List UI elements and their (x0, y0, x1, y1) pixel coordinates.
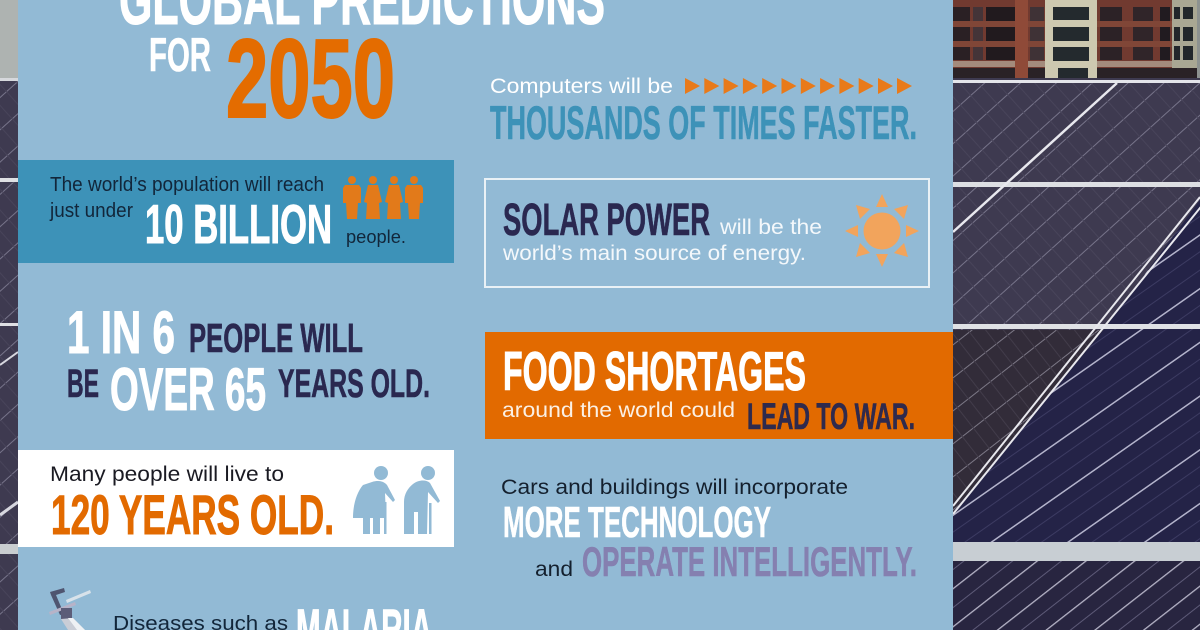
connector word: and (535, 558, 573, 581)
solar text line two: world’s main source of energy. (502, 242, 806, 265)
main infographic panel (18, 0, 953, 630)
food headline: FOOD SHORTAGES (503, 340, 806, 402)
text: cars and buildings prediction: Cars and buildings will incorporate (501, 475, 848, 499)
icon: sun (845, 194, 919, 267)
panel: solar power (485, 179, 929, 287)
panel: population (18, 160, 454, 263)
intelligence headline: OPERATE INTELLIGENTLY. (582, 538, 917, 585)
statistic: one in six over 65: BE (67, 362, 99, 406)
icon: elderly couple (353, 466, 440, 534)
longevity lead text: Many people will live to (50, 463, 284, 486)
text: computers prediction (490, 75, 917, 149)
panel: food shortages (485, 332, 953, 439)
technology headline: MORE TECHNOLOGY (503, 498, 771, 547)
panel: longevity (18, 450, 454, 547)
statistic: one in six over 65: 1 IN 6 (67, 299, 175, 366)
text: malaria prediction (113, 597, 432, 630)
background photo: apartment building (953, 0, 1200, 78)
solar headline: SOLAR POWER (503, 194, 710, 245)
background photo: grey wall at left edge (0, 0, 18, 78)
statistic: one in six over 65 (67, 299, 430, 423)
title: FOR (149, 28, 211, 81)
statistic: one in six over 65: PEOPLE WILL (189, 315, 363, 361)
icon: syringe (49, 588, 91, 630)
title (119, 0, 605, 141)
population qualifier: just under (49, 200, 133, 222)
longevity figure: 120 YEARS OLD. (51, 483, 334, 546)
population lead text: The world’s population will reach (50, 174, 324, 196)
food consequence: LEAD TO WAR. (747, 396, 915, 437)
title: 2050 (226, 17, 395, 141)
text: cars and buildings prediction (501, 475, 917, 585)
population figure: 10 BILLION (145, 193, 332, 255)
solar text line one: will be the (719, 216, 822, 239)
statistic: one in six over 65: OVER 65 (110, 356, 266, 423)
text: computers prediction: Computers will be (490, 75, 673, 98)
icon: arrow row (685, 78, 912, 94)
icon: four people (343, 176, 423, 219)
food text: around the world could (502, 398, 735, 422)
population suffix: people. (346, 226, 406, 247)
statistic: one in six over 65: YEARS OLD. (278, 362, 430, 406)
